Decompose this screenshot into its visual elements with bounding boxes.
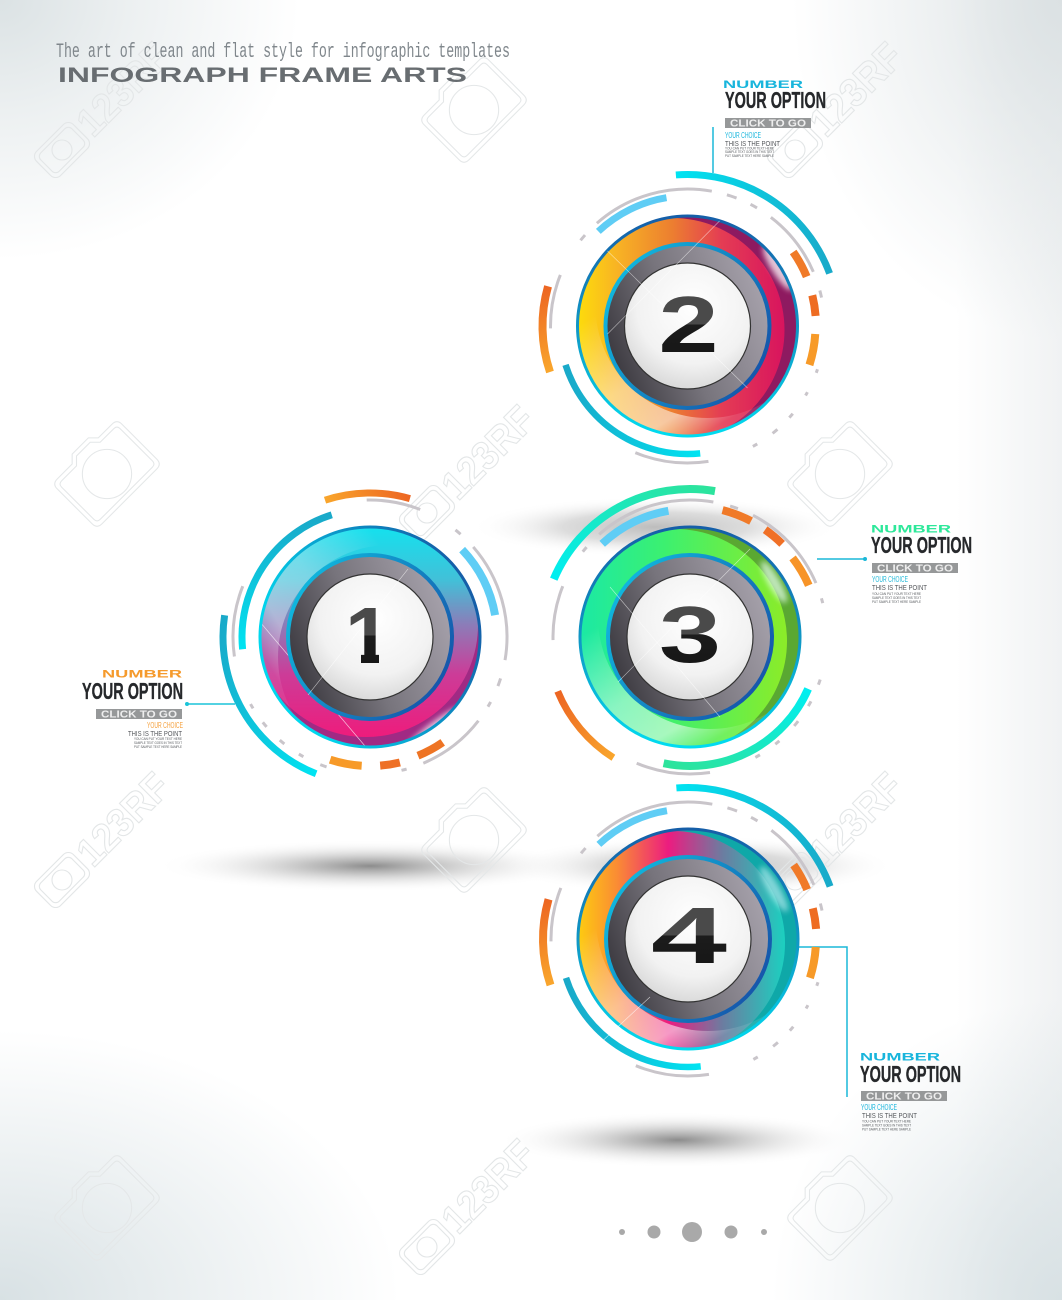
circle 4 colour ring	[580, 830, 796, 1048]
label: option 4: YOU CAN PUT YOUR TEXT HERE	[862, 1120, 912, 1124]
title: The art of clean and flat style for infographic templates	[56, 41, 510, 64]
circle 1 arcs	[179, 446, 561, 828]
shadow: behind circle 3	[470, 497, 840, 557]
label: option 1: PUT SAMPLE TEXT HERE SAMPLE	[134, 745, 183, 749]
label: option 1	[82, 668, 183, 749]
watermark pattern	[29, 35, 912, 1282]
label: option 1: YOU CAN PUT YOUR TEXT HERE	[134, 737, 183, 741]
circle 4 hub	[583, 857, 770, 1059]
label: option 3: NUMBER	[871, 524, 951, 536]
circle 3 colour ring	[582, 528, 798, 746]
label: option 4: PUT SAMPLE TEXT HERE SAMPLE	[862, 1128, 912, 1132]
label: option 1: NUMBER	[102, 668, 182, 680]
title: INFOGRAPH FRAME ARTS	[58, 64, 467, 87]
circle 4 arcs	[504, 755, 872, 1123]
label: option 3: YOUR OPTION	[871, 532, 972, 558]
label: option 4	[860, 1052, 961, 1132]
shadow: beneath circle 1	[155, 840, 585, 892]
label: option 3	[871, 524, 972, 604]
digit 2: 2	[658, 280, 718, 369]
circle 2	[538, 171, 833, 464]
circle 1 hub	[288, 555, 452, 719]
label: option 4: YOUR CHOICE	[861, 1103, 897, 1112]
connector: circle 3 to its label	[817, 557, 867, 561]
label: option 2: CLICK TO GO	[730, 118, 806, 130]
label: option 3: SAMPLE TEXT GOES IN THIS TEXT	[872, 596, 921, 600]
circle 2 arcs	[504, 142, 871, 510]
connector: circle 1 to its label	[185, 702, 235, 706]
label: option 3: PUT SAMPLE TEXT HERE SAMPLE	[872, 600, 922, 604]
label: option 4: SAMPLE TEXT GOES IN THIS TEXT	[862, 1124, 911, 1128]
connector: circle 2 to its label	[712, 127, 714, 173]
label: option 2: SAMPLE TEXT GOES IN THIS TEXT	[725, 150, 774, 154]
label: option 4: YOUR OPTION	[860, 1061, 961, 1087]
circle 3 hub	[608, 549, 772, 719]
title	[56, 41, 510, 87]
circle 2 colour ring	[579, 218, 796, 434]
circle 2 hub	[606, 221, 770, 408]
digit 1: 1	[345, 591, 391, 680]
circle 1 colour ring	[262, 528, 478, 746]
label: option 3: YOUR CHOICE	[872, 575, 908, 584]
circle 3 arcs	[493, 440, 887, 834]
circle 4	[539, 784, 834, 1078]
label: option 1: THIS IS THE POINT	[128, 729, 182, 738]
label: option 2	[723, 79, 826, 158]
label: option 1: YOUR CHOICE	[147, 721, 183, 730]
circle 1	[220, 490, 508, 777]
label: option 3: YOU CAN PUT YOUR TEXT HERE	[872, 592, 922, 596]
digit 3: 3	[659, 590, 721, 679]
label: option 3: CLICK TO GO	[877, 564, 953, 574]
label: option 2: YOUR CHOICE	[725, 131, 761, 140]
shadow: behind circle 4	[505, 836, 895, 896]
label: option 2: YOU CAN PUT YOUR TEXT HERE	[725, 146, 775, 150]
label: option 2: PUT SAMPLE TEXT HERE SAMPLE	[725, 154, 775, 158]
digit 4: 4	[651, 891, 728, 980]
label: option 3: THIS IS THE POINT	[872, 583, 927, 592]
label: option 4: THIS IS THE POINT	[862, 1111, 917, 1120]
label: option 2: YOUR OPTION	[725, 87, 826, 113]
circle 3	[550, 485, 824, 776]
label: option 1: CLICK TO GO	[101, 710, 177, 720]
connector: circle 4 to its label	[799, 947, 847, 1097]
label: option 4: NUMBER	[860, 1052, 940, 1064]
shadow: beneath circle 4	[498, 1112, 858, 1168]
label: option 2: THIS IS THE POINT	[725, 139, 780, 148]
pagination dots	[619, 1222, 767, 1242]
label: option 1: YOUR OPTION	[82, 678, 183, 704]
label: option 4: CLICK TO GO	[866, 1092, 942, 1102]
label: option 2: NUMBER	[723, 79, 803, 91]
label: option 1: SAMPLE TEXT GOES IN THIS TEXT	[134, 741, 182, 745]
